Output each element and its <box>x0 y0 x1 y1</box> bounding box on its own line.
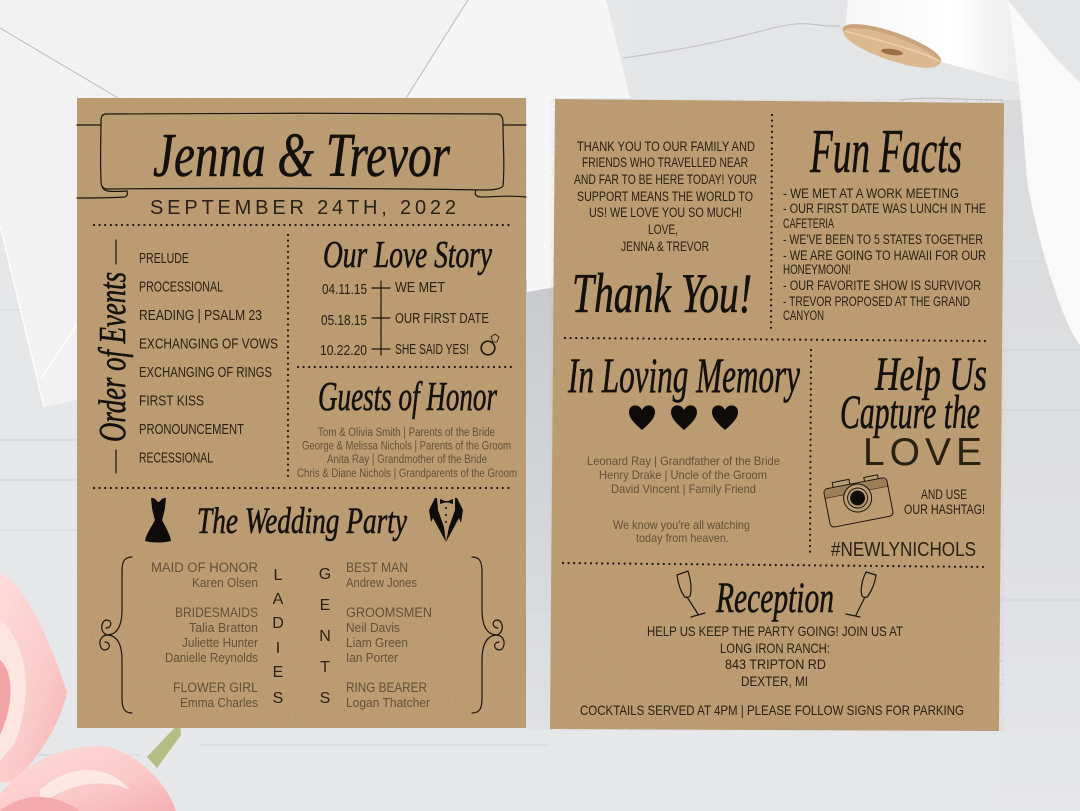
fun facts list: - TREVOR PROPOSED AT THE GRAND <box>783 294 970 309</box>
envelopes <box>0 0 630 407</box>
right bracket <box>472 557 504 713</box>
roses and leaf <box>0 572 181 811</box>
ladies names: Emma Charles <box>180 695 258 710</box>
hashtag prompt <box>904 487 985 517</box>
vertical word gents: E <box>320 597 330 614</box>
love story timeline: 05.18.15 <box>321 312 367 329</box>
guests of honor names: Tom & Olivia Smith | Parents of the Bride <box>318 427 495 439</box>
banner with names: Jenna & Trevor <box>153 122 451 190</box>
thank you message: LOVE, <box>648 222 678 237</box>
reception details: HELP US KEEP THE PARTY GOING! JOIN US AT <box>647 623 903 639</box>
thank you message: AND FAR TO BE HERE TODAY! YOUR <box>574 172 757 187</box>
order of events list: EXCHANGING OF VOWS <box>139 336 278 352</box>
ladies names: BRIDESMAIDS <box>175 605 258 620</box>
banner with names <box>77 113 526 198</box>
memorial names <box>587 454 780 545</box>
vertical word gents <box>319 566 331 707</box>
gents names: Liam Green <box>346 635 408 650</box>
hashtag prompt: AND USE <box>921 487 967 502</box>
ladies names <box>151 560 259 710</box>
gents names: RING BEARER <box>346 680 427 695</box>
fun facts list: - WE MET AT A WORK MEETING <box>783 186 959 201</box>
love story timeline: OUR FIRST DATE <box>395 311 489 327</box>
fun facts list: - WE ARE GOING TO HAWAII FOR OUR <box>783 248 986 263</box>
thank you heading: Thank You! <box>572 263 752 325</box>
memorial names: David Vincent | Family Friend <box>611 482 756 496</box>
vertical word ladies: I <box>276 640 280 657</box>
guests of honor names <box>297 427 517 480</box>
thank you message: JENNA & TREVOR <box>621 239 709 254</box>
vertical word gents: T <box>320 659 330 676</box>
thank you message: THANK YOU TO OUR FAMILY AND <box>577 139 755 154</box>
guests of honor names: Anita Ray | Grandmother of the Bride <box>327 454 487 466</box>
vertical word ladies: D <box>272 615 284 632</box>
ladies names: MAID OF HONOR <box>151 560 258 575</box>
gents names: BEST MAN <box>346 560 408 575</box>
love story timeline: WE MET <box>395 280 445 296</box>
reception details <box>580 623 964 718</box>
vertical word ladies <box>272 567 284 707</box>
ladies names: Karen Olsen <box>192 575 258 590</box>
icon: three hearts <box>629 405 738 430</box>
vertical word gents: S <box>320 690 330 707</box>
ladies names: Talia Bratton <box>189 620 258 635</box>
ribbon spool <box>839 0 1021 84</box>
hashtag: #NEWLYNICHOLS <box>831 539 976 561</box>
love story timeline: 10.22.20 <box>320 342 367 359</box>
fun facts heading: Fun Facts <box>809 118 962 186</box>
thank you message: FRIENDS WHO TRAVELLED NEAR <box>582 155 748 170</box>
help us capture heading: Help Us <box>874 348 987 401</box>
ladies names: FLOWER GIRL <box>173 680 258 695</box>
order of events list: PROCESSIONAL <box>139 280 223 296</box>
order of events list: READING | PSALM 23 <box>139 308 262 324</box>
love story timeline: SHE SAID YES! <box>395 342 469 358</box>
ladies names: Juliette Hunter <box>182 635 259 650</box>
fun facts list: CANYON <box>783 308 824 323</box>
vertical word ladies: A <box>273 591 284 608</box>
gents names: Neil Davis <box>346 620 400 635</box>
gents names: GROOMSMEN <box>346 605 432 620</box>
icon: camera <box>822 472 894 528</box>
reception details: COCKTAILS SERVED AT 4PM | PLEASE FOLLOW SIGNS FOR PARKING <box>580 702 964 718</box>
gents names: Ian Porter <box>346 650 399 665</box>
guests of honor names: Chris & Diane Nichols | Grandparents of the Groom <box>297 468 517 480</box>
order of events list: RECESSIONAL <box>139 450 213 466</box>
panel: right card <box>550 99 1004 731</box>
vertical word gents: N <box>319 628 331 645</box>
gents names <box>346 560 432 710</box>
help us capture heading: Capture the <box>840 386 980 439</box>
fun facts list <box>783 186 986 323</box>
thank you message: SUPPORT MEANS THE WORLD TO <box>577 189 753 204</box>
icon: ring <box>481 334 499 355</box>
icon: tuxedo <box>429 498 463 542</box>
memorial names: We know you're all watching <box>613 518 750 532</box>
love story timeline: 04.11.15 <box>322 281 367 298</box>
fun facts list: - OUR FIRST DATE WAS LUNCH IN THE <box>783 201 986 216</box>
thank you message: US! WE LOVE YOU SO MUCH! <box>589 205 742 220</box>
vertical word ladies: S <box>273 690 283 707</box>
wedding party heading: The Wedding Party <box>197 501 407 542</box>
help us capture heading <box>840 348 987 474</box>
order of events list: FIRST KISS <box>139 394 204 410</box>
hashtag prompt: OUR HASHTAG! <box>904 502 985 517</box>
in loving memory heading: In Loving Memory <box>567 347 800 403</box>
fun facts list: CAFETERIA <box>783 216 834 231</box>
reception details: LONG IRON RANCH: <box>720 640 830 656</box>
panel: left card <box>77 98 526 728</box>
icon: dress <box>145 498 171 542</box>
fun facts list: - OUR FAVORITE SHOW IS SURVIVOR <box>783 278 981 293</box>
vertical word ladies: E <box>273 664 283 681</box>
order of events list <box>139 251 278 466</box>
ladies names: Danielle Reynolds <box>165 650 258 665</box>
fun facts list: - WE'VE BEEN TO 5 STATES TOGETHER <box>783 232 983 247</box>
icon: right champagne glass <box>846 572 876 617</box>
memorial names: Henry Drake | Uncle of the Groom <box>599 468 767 482</box>
vertical word gents: G <box>319 566 331 583</box>
memorial names: Leonard Ray | Grandfather of the Bride <box>587 454 780 468</box>
left bracket <box>100 557 132 713</box>
gents names: Andrew Jones <box>346 575 417 590</box>
gents names: Logan Thatcher <box>346 695 431 710</box>
reception details: DEXTER, MI <box>741 673 808 689</box>
guests of honor names: George & Melissa Nichols | Parents of the Groom <box>302 440 511 452</box>
order of events list: PRELUDE <box>139 251 189 267</box>
reception details: 843 TRIPTON RD <box>725 656 826 672</box>
guests of honor heading: Guests of Honor <box>318 373 498 419</box>
date: SEPTEMBER 24TH, 2022 <box>150 197 456 219</box>
thank you message <box>574 139 757 254</box>
love story timeline <box>320 280 499 359</box>
ribbon lower strand <box>1008 0 1080 345</box>
order of events list: PRONOUNCEMENT <box>139 422 244 438</box>
order of events vertical heading: Order of Events <box>92 272 134 442</box>
our love story heading: Our Love Story <box>323 234 492 276</box>
reception heading: Reception <box>715 575 834 622</box>
help us capture heading: LOVE <box>863 431 982 474</box>
icon: left champagne glass <box>677 571 705 617</box>
order of events list: EXCHANGING OF RINGS <box>139 365 272 381</box>
memorial names: today from heaven. <box>636 531 729 545</box>
fun facts list: HONEYMOON! <box>783 262 851 277</box>
vertical word ladies: L <box>274 567 283 584</box>
